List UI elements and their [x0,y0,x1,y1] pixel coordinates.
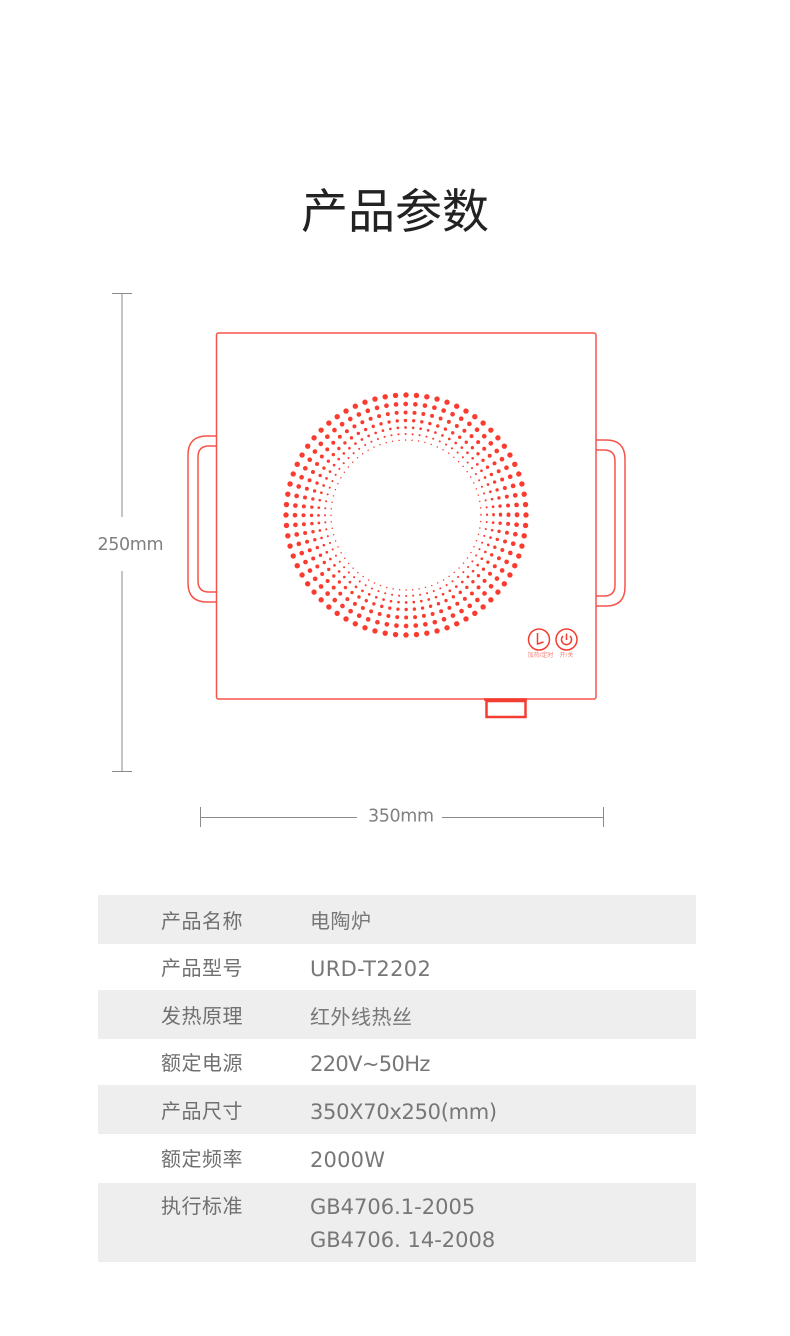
table row: heating principle [98,990,696,1039]
table row: model: URD-T2202 [310,957,431,981]
table row: product name: 产品名称 [161,911,243,933]
height dimension: 250mm: 250mm [98,535,164,555]
height dimension: 250mm [98,294,164,772]
width dimension: 350mm [200,806,604,827]
power button [556,629,577,659]
stove body [216,333,596,699]
table row: product name [98,895,696,944]
table row: heating principle: 发热原理 [161,1006,243,1028]
table row: standards: GB4706. 14-2008 [310,1228,495,1252]
bottom connector [484,700,527,717]
product dimension diagram [98,293,626,827]
table row: heating principle: 红外线热丝 [310,1007,412,1029]
heating dot ring [286,395,526,635]
table row: dimensions: 350X70x250(mm) [310,1100,497,1124]
table row: standards: 执行标准 [161,1196,243,1218]
table row: rated power source: 额定电源 [161,1053,243,1075]
table row: rated power source: 220V~50Hz [310,1052,430,1076]
width dimension: 350mm: 350mm [368,806,434,826]
table row: rated frequency: 2000W [310,1148,385,1172]
table row: standards [98,1183,696,1262]
table row: dimensions: 产品尺寸 [161,1101,243,1123]
table row: rated power source [161,1052,430,1076]
timer button: 加热/定时 [528,651,553,659]
left handle [188,436,216,602]
table row: model: 产品型号 [161,958,243,980]
timer button [528,629,553,659]
table row: standards: GB4706.1-2005 [310,1195,475,1219]
power button: 开/关 [560,651,573,659]
right handle [596,440,625,606]
table row: dimensions [98,1085,696,1134]
table row: product name: 电陶炉 [310,911,372,933]
table row: model [161,957,431,981]
table row: rated frequency [161,1148,385,1172]
table row: rated frequency: 额定频率 [161,1149,243,1171]
title: 产品参数 [301,185,489,238]
